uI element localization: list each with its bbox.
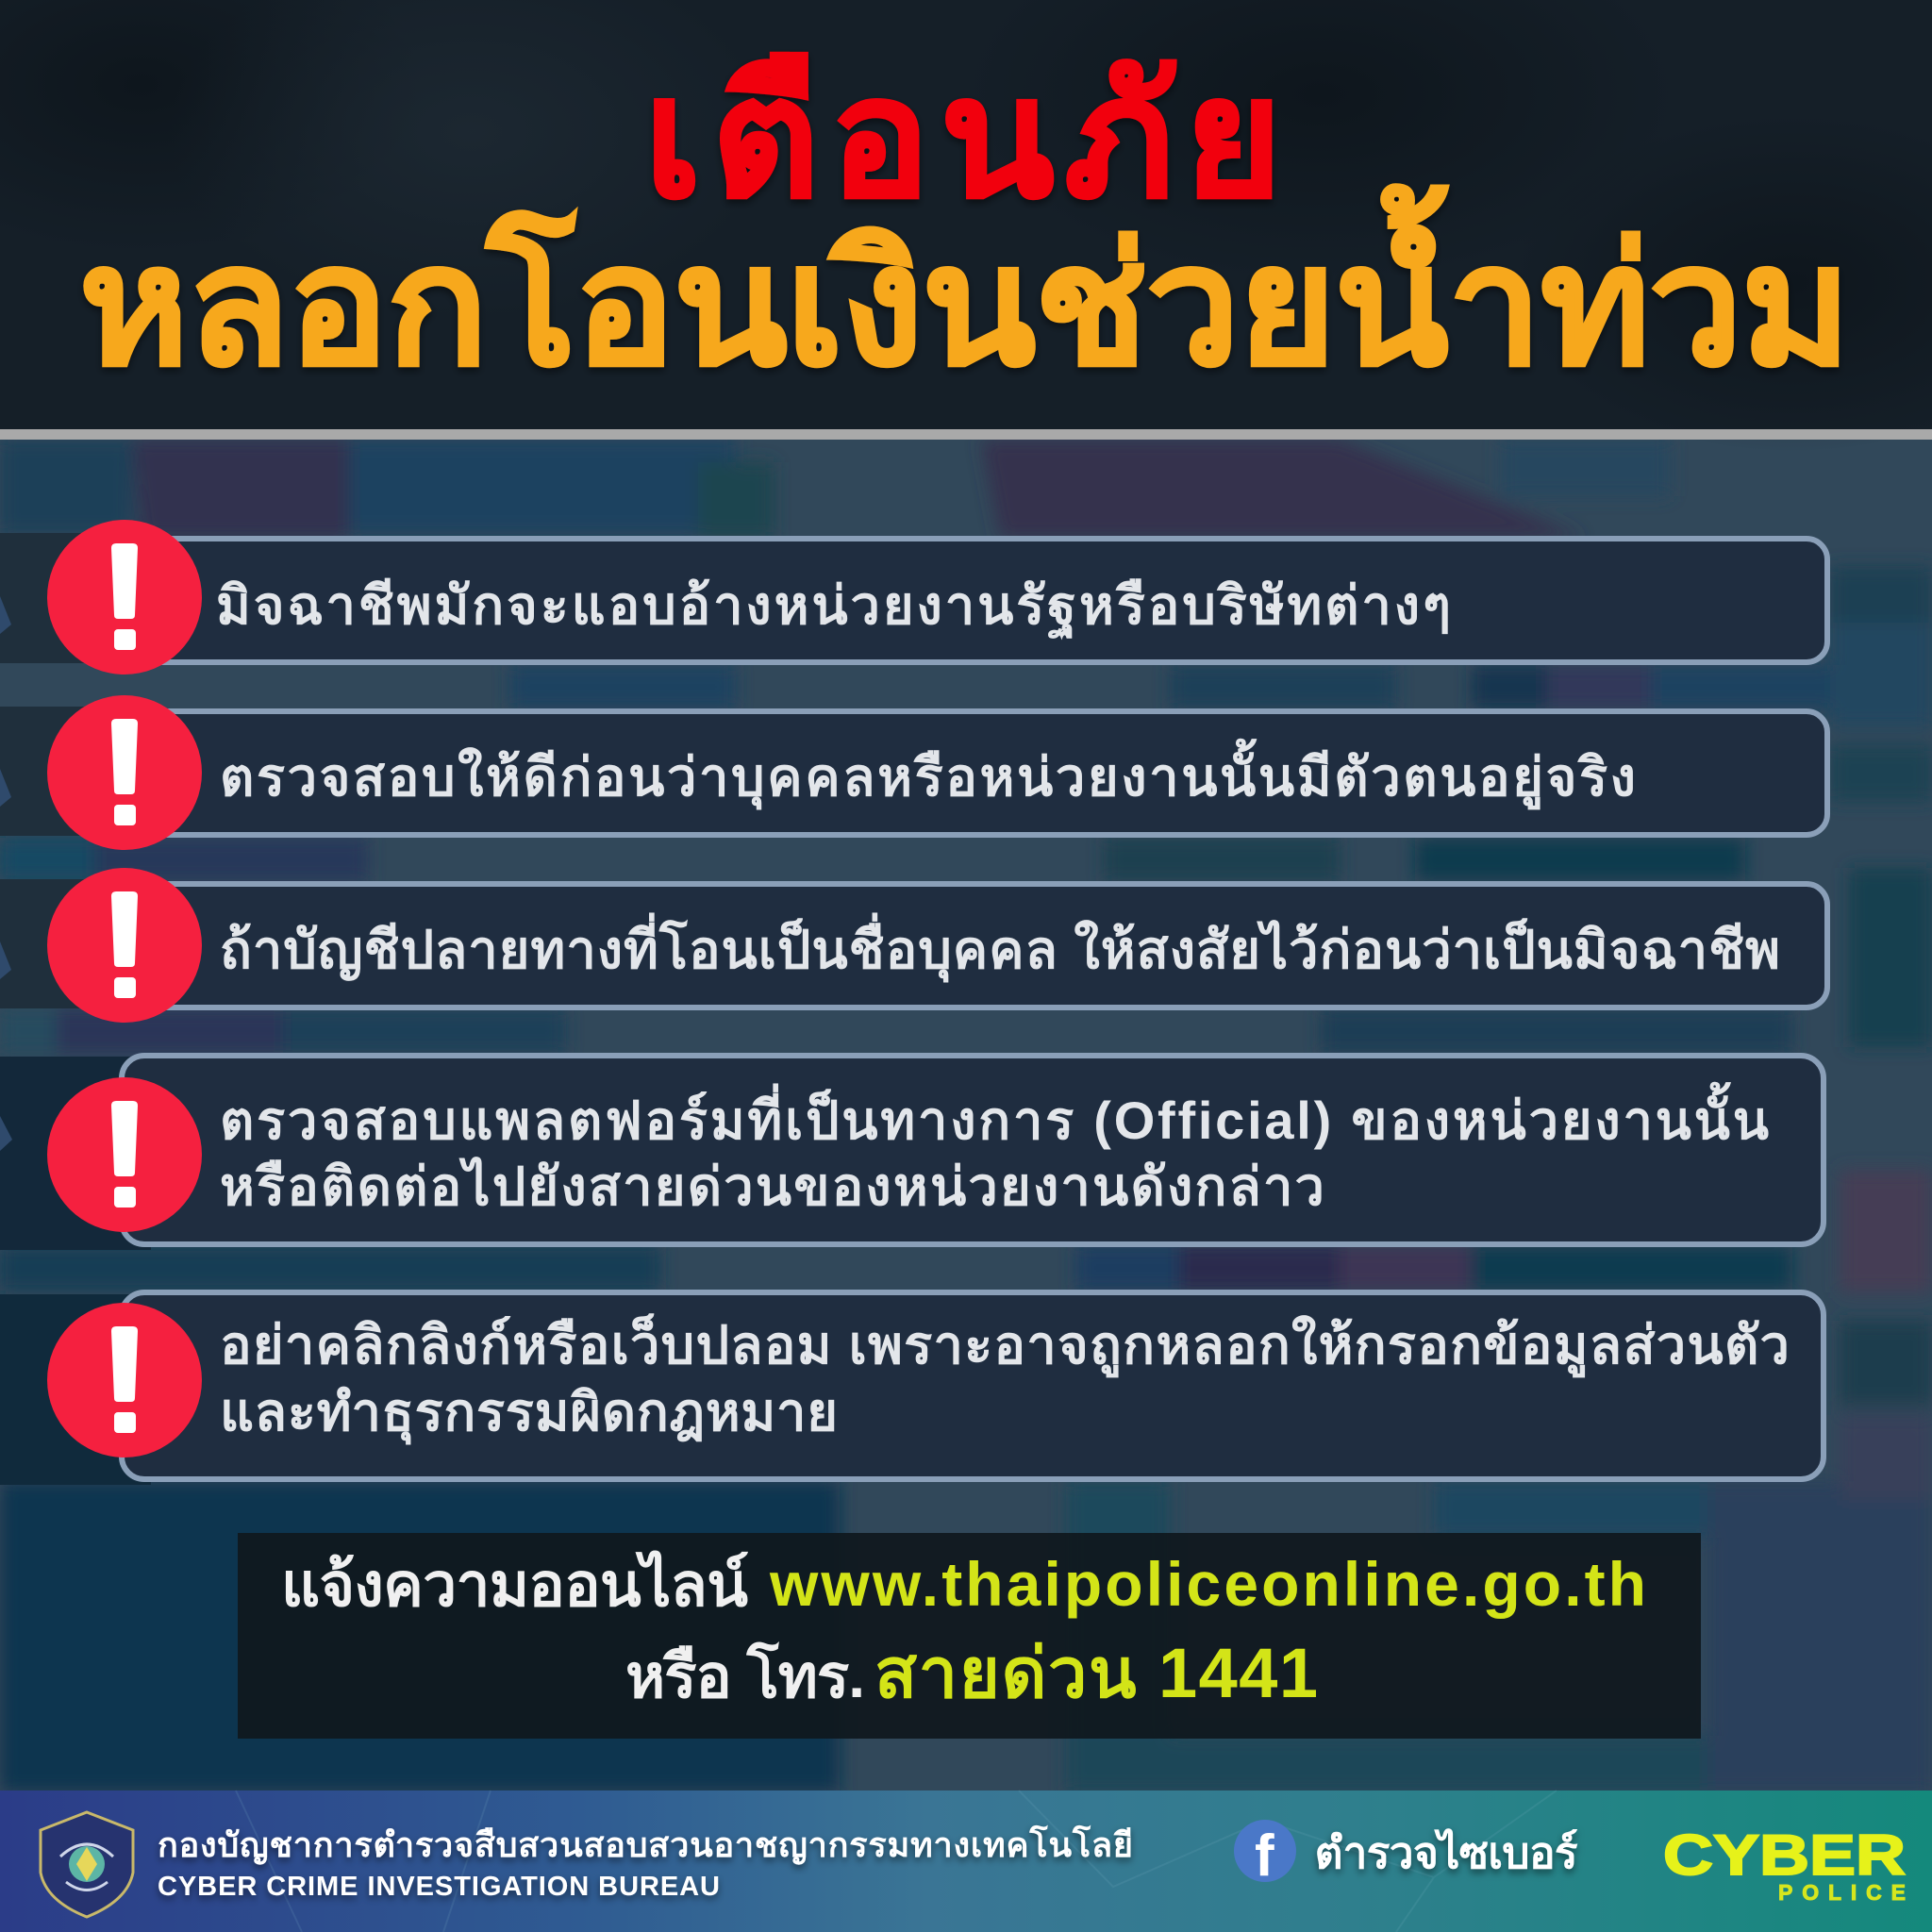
facebook icon [1234, 1820, 1296, 1889]
police badge [41, 1812, 133, 1917]
bureau name [158, 1824, 1133, 1902]
cyber police logo: POLICE [1778, 1880, 1906, 1905]
panel 5 [47, 1292, 1824, 1479]
heading divider [0, 429, 1932, 440]
panel 4 text: หรือติดต่อไปยังสายด่วนของหน่วยงานดังกล่าว [220, 1156, 1324, 1216]
panel 1 icon [47, 520, 202, 675]
footer network lines [236, 1790, 1557, 1932]
panel 2 text: ตรวจสอบให้ดีก่อนว่าบุคคลหรือหน่วยงานนั้นมีตัวตนอยู่จริง [220, 739, 1636, 810]
panel 3 text: ถ้าบัญชีปลายทางที่โอนเป็นชื่อบุคคล ให้สงสัยไว้ก่อนว่าเป็นมิจฉาชีพ [220, 912, 1780, 983]
panel 3 [47, 868, 1827, 1023]
panel 3 icon [47, 868, 202, 1023]
title [79, 46, 1851, 399]
bureau name: CYBER CRIME INVESTIGATION BUREAU [158, 1872, 720, 1902]
cyber police logo: CYBER [1663, 1824, 1906, 1887]
panel 2 [47, 695, 1827, 850]
panel 5 text [220, 1312, 1790, 1445]
panel 5 icon [47, 1303, 202, 1457]
facebook page name: ตำรวจไซเบอร์ [1315, 1828, 1578, 1877]
cyber police logo [1663, 1824, 1906, 1905]
panel 4 [47, 1056, 1824, 1244]
title line 2: หลอกโอนเงินช่วยน้ำท่วม [79, 184, 1851, 399]
dark strips behind alert icons [0, 533, 151, 1485]
bureau name: กองบัญชาการตำรวจสืบสวนสอบสวนอาชญากรรมทางเทคโนโลยี [158, 1824, 1133, 1865]
panel 4 icon [47, 1077, 202, 1232]
contact line 1 [281, 1549, 1646, 1619]
facebook icon: f [1255, 1824, 1274, 1889]
panel 4 text: ตรวจสอบแพลตฟอร์มที่เป็นทางการ (Official) ของหน่วยงานนั้น [220, 1082, 1769, 1150]
contact line 1: www.thaipoliceonline.go.th [769, 1549, 1646, 1619]
panel 5 text: อย่าคลิกลิงก์หรือเว็บปลอม เพราะอาจถูกหลอกให้กรอกข้อมูลส่วนตัว [220, 1312, 1790, 1378]
contact line 2: สายด่วน 1441 [874, 1634, 1318, 1712]
contact line 2 [625, 1634, 1318, 1712]
panel 5 text: และทำธุรกรรมผิดกฎหมาย [220, 1382, 838, 1445]
contact line 1: แจ้งความออนไลน์ [281, 1550, 749, 1619]
panel 1 [47, 520, 1827, 675]
panel 1 text: มิจฉาชีพมักจะแอบอ้างหน่วยงานรัฐหรือบริษัทต่างๆ [216, 575, 1451, 640]
header dark band [0, 0, 1932, 453]
contact line 2: หรือ โทร. [625, 1641, 865, 1710]
panel 4 text [220, 1082, 1769, 1216]
panel 2 icon [47, 695, 202, 850]
footer band [0, 1790, 1932, 1932]
title line 1: เตือนภัย [644, 46, 1282, 231]
contact box [238, 1533, 1701, 1739]
